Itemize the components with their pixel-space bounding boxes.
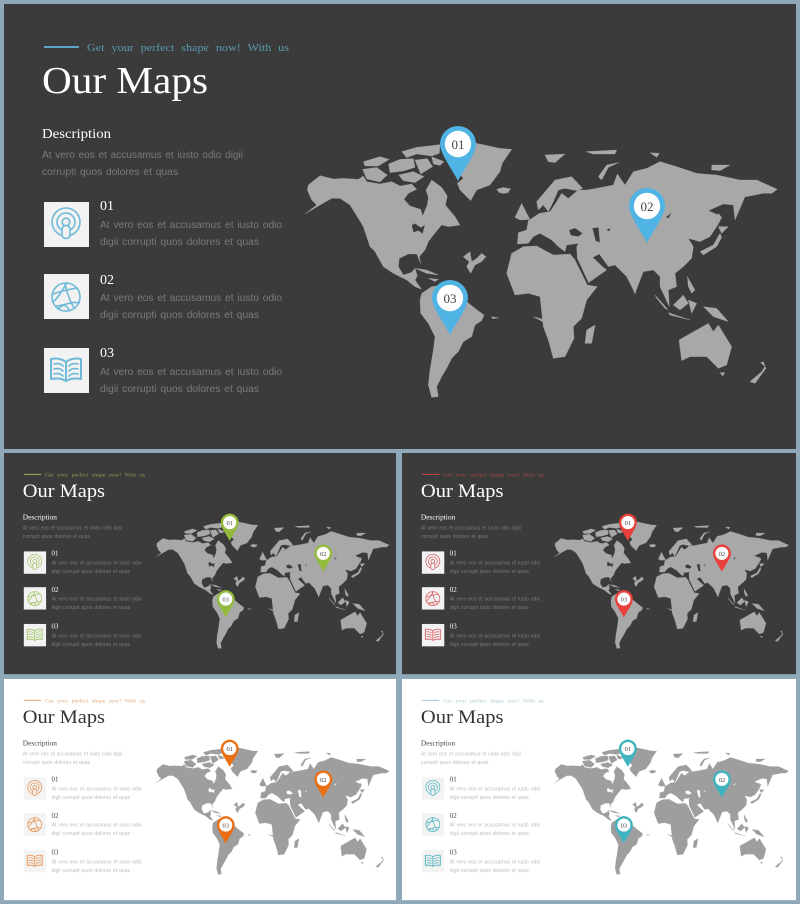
- pin 02: 02: [719, 777, 725, 784]
- item 01: At vero eos et accusamus et iusto odio: [52, 786, 142, 792]
- pin 03: [217, 816, 235, 844]
- text block: description: [421, 514, 521, 540]
- pin 03: 03: [223, 597, 229, 604]
- text block: description: [42, 127, 243, 178]
- eyebrow: tagline: Get your perfect shape now! With us: [87, 42, 289, 54]
- icon: book: [24, 624, 46, 646]
- item 02: [52, 812, 142, 837]
- pin 01: 01: [227, 520, 233, 527]
- pin 01: [221, 740, 239, 767]
- item 03: At vero eos et accusamus et iusto odio: [450, 633, 540, 639]
- world map: [554, 748, 789, 874]
- item 02: 02: [52, 812, 59, 820]
- icon: podcast: [24, 777, 46, 800]
- item 01: [100, 199, 282, 248]
- text block: description: At vero eos et accusamus et iusto odio digii: [421, 752, 521, 758]
- item 02: digii corrupti quos dolores et quas: [450, 831, 529, 837]
- title: Our Maps: [421, 707, 503, 728]
- pin 02: [713, 770, 731, 798]
- pin 02: [713, 544, 731, 572]
- panel: green slide: [4, 453, 396, 674]
- icon: globe: [24, 813, 46, 836]
- item 03: digii corrupti quos dolores et quas: [450, 642, 529, 648]
- item 02: digii corrupti quos dolores et quas: [52, 605, 131, 611]
- item 02: 02: [450, 812, 457, 820]
- item 02: digii corrupti quos dolores et quas: [450, 605, 529, 611]
- text block: description: [421, 740, 521, 766]
- item 03: 03: [100, 346, 114, 361]
- text block: description: Description: [42, 127, 111, 142]
- pin 02: [629, 188, 665, 243]
- panel: teal slide: [402, 679, 796, 900]
- item 02: [100, 273, 282, 321]
- text block: description: At vero eos et accusamus et iusto odio digii: [421, 526, 521, 532]
- text block: description: corrupti quos dolores et quas: [23, 760, 91, 766]
- pin 01: [619, 514, 637, 541]
- item 01: digii corrupti quos dolores et quas: [52, 795, 131, 801]
- item 03: digii corrupti quos dolores et quas: [450, 868, 529, 874]
- text block: description: [23, 514, 122, 540]
- eyebrow: tagline: Get your perfect shape now! With us: [443, 697, 544, 704]
- pin 02: 02: [320, 777, 326, 784]
- item 03: [450, 622, 540, 648]
- icon: globe: [422, 813, 444, 836]
- item 02: digii corrupti quos dolores et quas: [100, 309, 259, 321]
- item 03: At vero eos et accusamus et iusto odio: [100, 366, 282, 378]
- pin 03: [217, 590, 235, 618]
- item 03: At vero eos et accusamus et iusto odio: [52, 633, 142, 639]
- pin 02: [314, 770, 332, 798]
- text block: description: Description: [421, 740, 456, 748]
- item 01: [52, 775, 142, 801]
- item 02: At vero eos et accusamus et iusto odio: [52, 823, 142, 829]
- panel: orange slide: [4, 679, 396, 900]
- icon: podcast: [44, 202, 89, 247]
- item 03: digii corrupti quos dolores et quas: [52, 868, 131, 874]
- item 02: [450, 586, 540, 611]
- item 03: 03: [52, 848, 59, 856]
- pin 01: [440, 126, 476, 181]
- title: Our Maps: [23, 707, 105, 728]
- panel: main blue slide: [4, 4, 796, 449]
- item 03: [52, 848, 142, 874]
- item 01: digii corrupti quos dolores et quas: [52, 569, 131, 575]
- world map: [155, 522, 389, 648]
- item 01: 01: [450, 775, 457, 783]
- text block: description: corrupti quos dolores et quas: [421, 760, 489, 766]
- item 01: digii corrupti quos dolores et quas: [450, 795, 529, 801]
- icon: book: [422, 624, 444, 646]
- world map: [155, 748, 389, 874]
- pin 02: [314, 544, 332, 572]
- item 03: 03: [450, 848, 457, 856]
- title: Our Maps: [421, 481, 503, 502]
- eyebrow: tagline: Get your perfect shape now! With us: [45, 697, 145, 704]
- icon: podcast: [422, 551, 444, 574]
- text block: description: At vero eos et accusamus et iusto odio digii: [23, 526, 122, 532]
- text block: description: Description: [23, 514, 58, 522]
- text block: description: corrupti quos dolores et quas: [421, 534, 489, 540]
- item 03: At vero eos et accusamus et iusto odio: [450, 859, 540, 865]
- item 01: digii corrupti quos dolores et quas: [100, 236, 259, 248]
- eyebrow: tagline: [24, 471, 145, 478]
- item 02: 02: [52, 586, 59, 594]
- pin 02: 02: [320, 551, 326, 558]
- item 02: At vero eos et accusamus et iusto odio: [52, 597, 142, 603]
- pin 03: 03: [621, 823, 627, 830]
- text block: description: corrupti quos dolores et quas: [42, 166, 178, 178]
- item 01: 01: [52, 775, 59, 783]
- item 01: 01: [450, 549, 457, 557]
- text block: description: At vero eos et accusamus et iusto odio digii: [42, 149, 243, 161]
- text block: description: Description: [23, 740, 58, 748]
- text block: description: [23, 740, 122, 766]
- item 02: 02: [100, 273, 114, 288]
- icon: book: [44, 348, 89, 393]
- item 03: digii corrupti quos dolores et quas: [52, 642, 131, 648]
- item 01: 01: [52, 549, 59, 557]
- item 02: digii corrupti quos dolores et quas: [52, 831, 131, 837]
- item 01: At vero eos et accusamus et iusto odio: [450, 560, 540, 566]
- eyebrow: tagline: Get your perfect shape now! With us: [45, 471, 145, 478]
- pin 03: [432, 280, 468, 335]
- icon: globe: [44, 274, 89, 319]
- icon: podcast: [422, 777, 444, 800]
- pin 01: 01: [452, 137, 464, 152]
- item 01: [52, 549, 142, 575]
- item 03: [52, 622, 142, 648]
- pin 02: 02: [640, 199, 654, 214]
- icon: podcast: [24, 551, 46, 574]
- panel: red slide: [402, 453, 796, 674]
- pin 02: 02: [719, 551, 725, 558]
- icon: book: [422, 850, 444, 872]
- item 03: [450, 848, 540, 874]
- item 03: [100, 346, 282, 395]
- icon: globe: [422, 587, 444, 610]
- pin 01: [619, 740, 637, 767]
- title: Our Maps: [42, 60, 208, 102]
- item 02: At vero eos et accusamus et iusto odio: [100, 292, 282, 304]
- pin 03: [615, 816, 633, 844]
- icon: globe: [24, 587, 46, 610]
- text block: description: corrupti quos dolores et quas: [23, 534, 91, 540]
- world map: [554, 522, 789, 648]
- icon: book: [24, 850, 46, 872]
- world map: [305, 143, 777, 397]
- eyebrow: tagline: [24, 697, 145, 704]
- pin 01: [221, 514, 239, 541]
- pin 01: 01: [625, 520, 631, 527]
- pin 03: 03: [621, 597, 627, 604]
- item 01: [450, 775, 540, 801]
- pin 03: [615, 590, 633, 618]
- pin 01: 01: [227, 746, 233, 753]
- item 01: digii corrupti quos dolores et quas: [450, 569, 529, 575]
- item 02: At vero eos et accusamus et iusto odio: [450, 823, 540, 829]
- text block: description: Description: [421, 514, 456, 522]
- pin 01: 01: [625, 746, 631, 753]
- item 03: 03: [52, 622, 59, 630]
- eyebrow: tagline: Get your perfect shape now! With us: [443, 471, 544, 478]
- text block: description: At vero eos et accusamus et iusto odio digii: [23, 752, 122, 758]
- title: Our Maps: [23, 481, 105, 502]
- item 02: [450, 812, 540, 837]
- eyebrow: tagline: [422, 471, 544, 478]
- item 03: At vero eos et accusamus et iusto odio: [52, 859, 142, 865]
- item 01: [450, 549, 540, 575]
- item 03: 03: [450, 622, 457, 630]
- item 01: At vero eos et accusamus et iusto odio: [52, 560, 142, 566]
- item 03: digii corrupti quos dolores et quas: [100, 383, 259, 395]
- item 02: At vero eos et accusamus et iusto odio: [450, 597, 540, 603]
- item 02: [52, 586, 142, 611]
- item 01: At vero eos et accusamus et iusto odio: [100, 219, 282, 231]
- pin 03: 03: [223, 823, 229, 830]
- eyebrow: tagline: [422, 697, 544, 704]
- item 02: 02: [450, 586, 457, 594]
- pin 03: 03: [444, 291, 456, 306]
- item 01: 01: [100, 199, 114, 214]
- item 01: At vero eos et accusamus et iusto odio: [450, 786, 540, 792]
